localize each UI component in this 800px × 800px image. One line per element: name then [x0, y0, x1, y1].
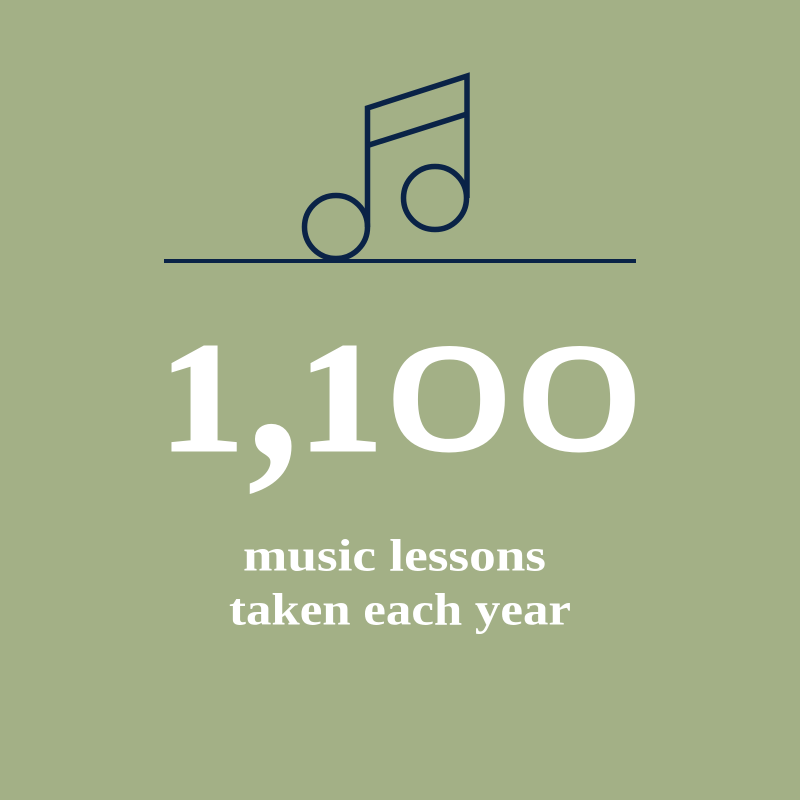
- caption: music lessons: [243, 530, 546, 580]
- big number: 1,100: [160, 251, 641, 508]
- caption: [229, 530, 571, 634]
- big number: 1,100: 0: [517, 317, 641, 480]
- caption: taken each year: [229, 584, 571, 634]
- big number: 1,100: ,: [247, 251, 300, 508]
- icon: music note on a line: [164, 76, 636, 261]
- big number: 1,100: 0: [387, 317, 511, 480]
- big number: 1,100: 1: [160, 312, 244, 485]
- big number: 1,100: 1: [299, 312, 383, 485]
